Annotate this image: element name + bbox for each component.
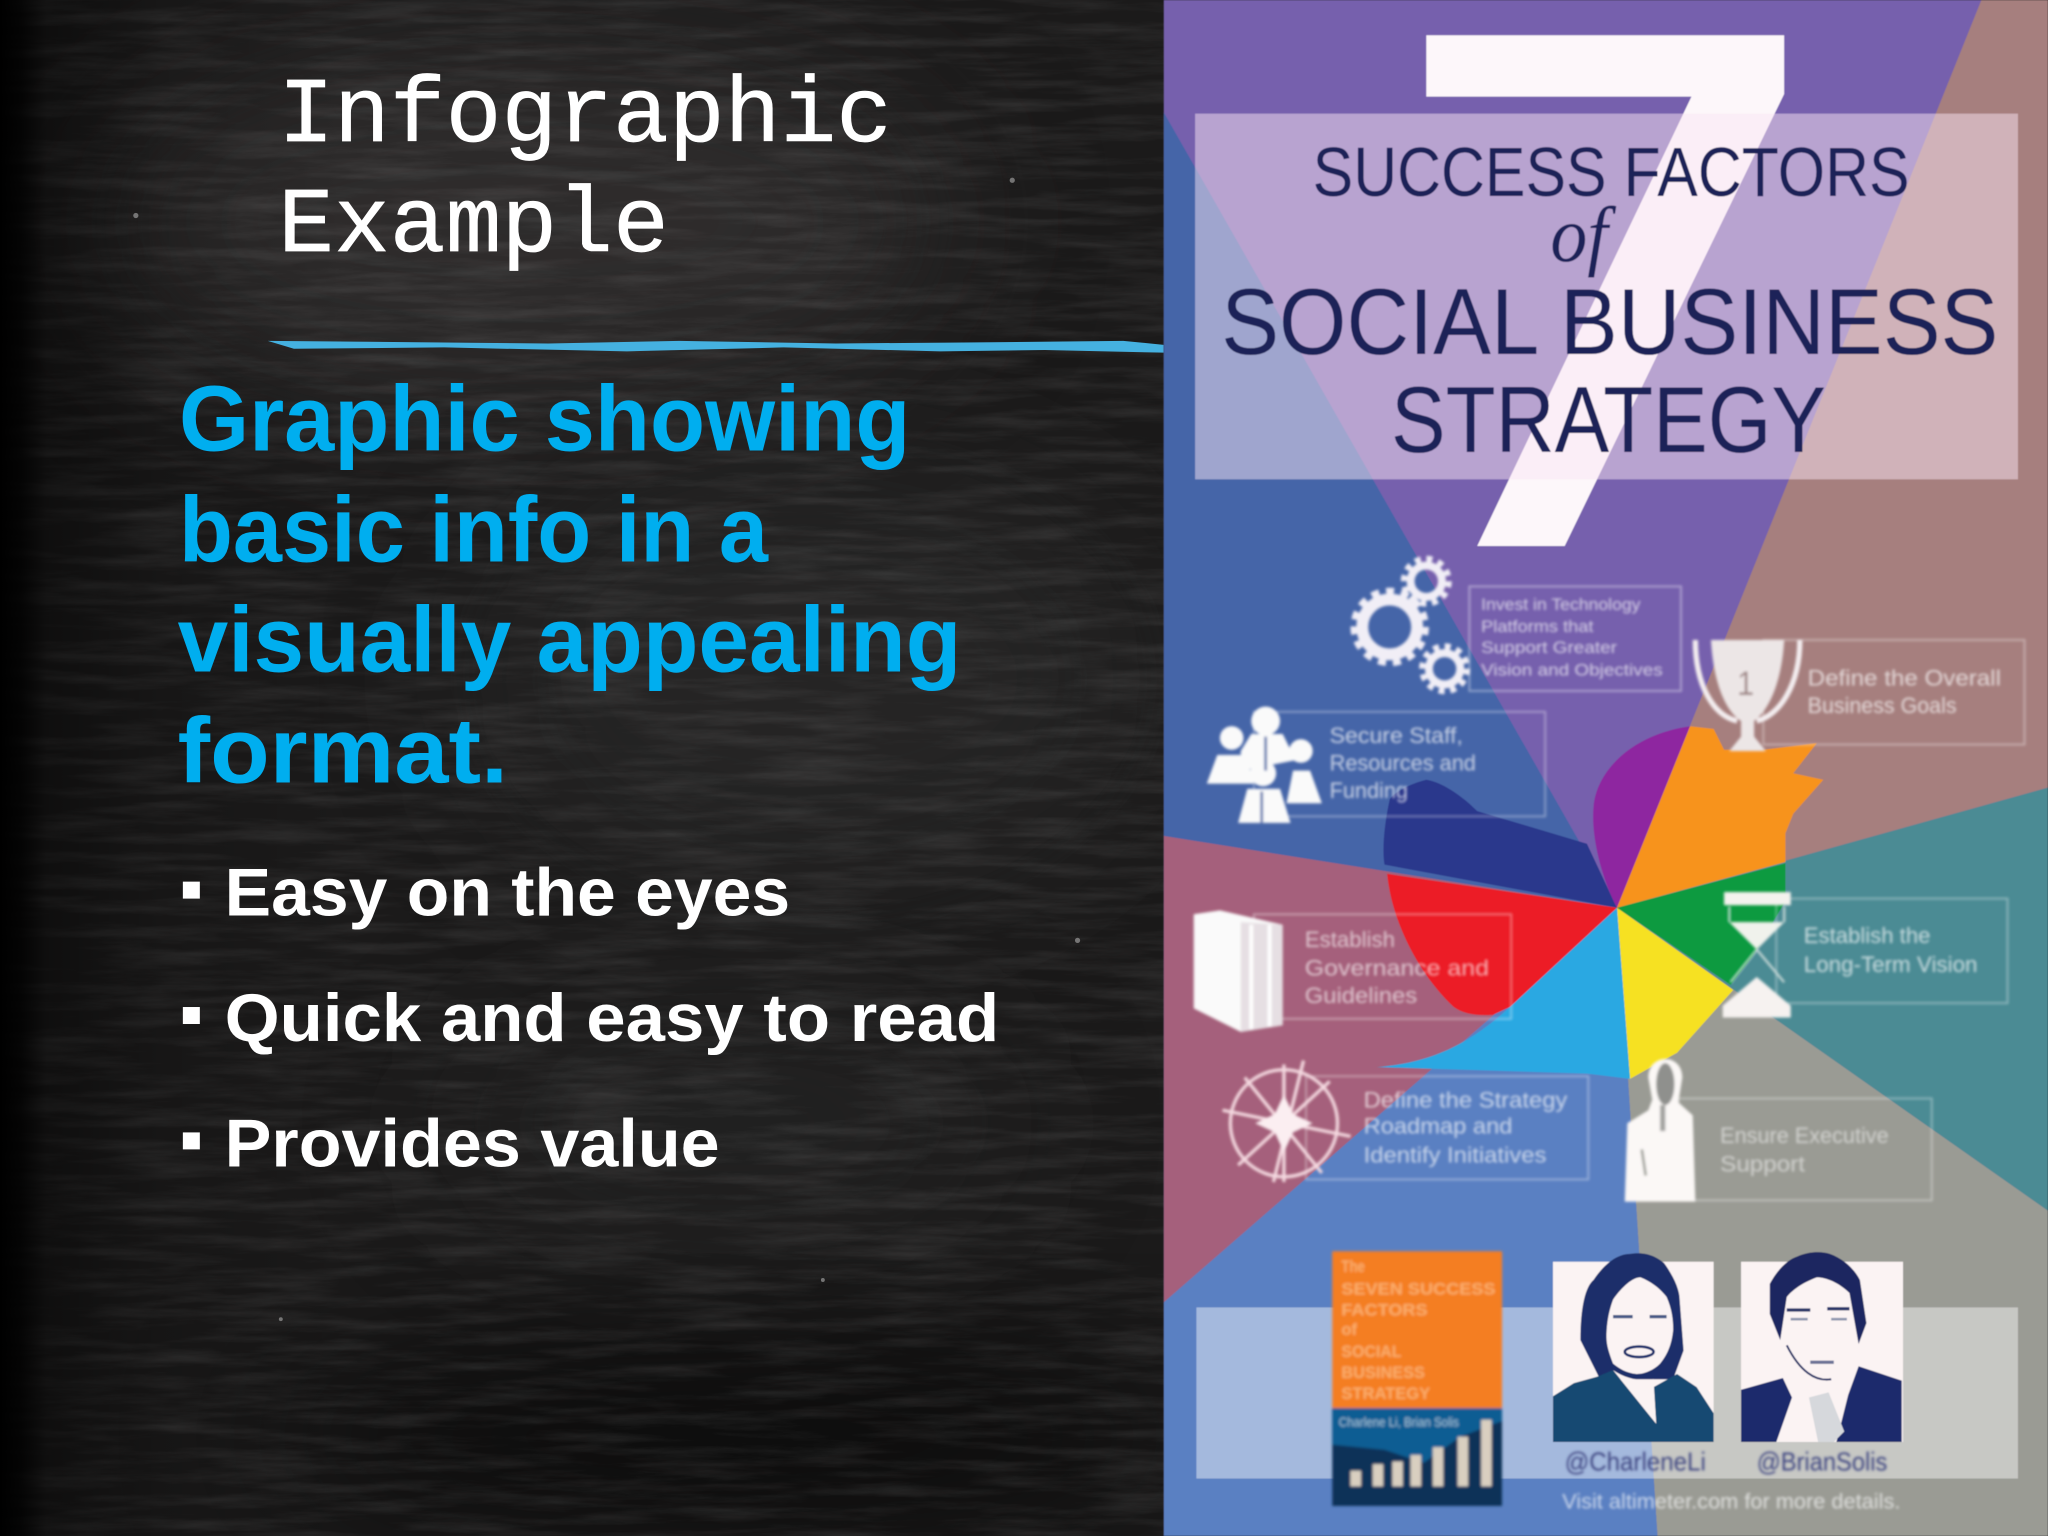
book cover: of	[1341, 1320, 1357, 1339]
book cover: The	[1341, 1257, 1365, 1276]
book cover: FACTORS	[1341, 1300, 1428, 1319]
heading: blue statement: basic info in a	[179, 478, 769, 582]
heading: blue statement: Graphic showing	[179, 367, 910, 471]
factor: executive support	[1625, 1059, 1932, 1202]
poster background wedges	[1164, 0, 2048, 1536]
factor: secure staff: Funding	[1330, 778, 1408, 803]
portrait: Charlene Li	[1553, 1253, 1714, 1442]
icon: people	[1207, 707, 1322, 823]
title: Example	[278, 174, 669, 279]
poster title: SUCCESS FACTORS	[1313, 133, 1910, 211]
factor: invest in technology: Invest in Technology	[1481, 595, 1641, 614]
factor: establish governance	[1194, 910, 1511, 1032]
poster title: STRATEGY	[1391, 367, 1826, 472]
book cover	[1332, 1251, 1502, 1506]
factor: executive support: Support	[1720, 1152, 1805, 1177]
poster title	[1221, 133, 1998, 472]
factor: define business goals: Define the Overall	[1808, 666, 2001, 691]
book cover: SEVEN SUCCESS	[1341, 1279, 1496, 1298]
book cover: SOCIAL	[1341, 1342, 1401, 1361]
bullet: easy on the eyes: Easy on the eyes	[225, 856, 790, 931]
book cover: BUSINESS	[1341, 1363, 1425, 1382]
bottom box	[1196, 1307, 2018, 1479]
factor: establish governance: Establish	[1305, 927, 1395, 952]
icon: compass rose	[1223, 1061, 1351, 1182]
factor: invest in technology: Support Greater	[1481, 638, 1617, 657]
heading: blue statement: format.	[178, 698, 508, 802]
icon: hourglass	[1723, 892, 1791, 1017]
factor: define business goals: Business Goals	[1808, 693, 1957, 718]
factor: secure staff	[1207, 707, 1545, 823]
factor: invest in technology: Vision and Objectives	[1481, 660, 1663, 679]
colour wheel	[1377, 726, 1823, 1079]
bullet list	[183, 856, 999, 1181]
blue chalk divider line	[268, 341, 1164, 353]
factor: secure staff: Resources and	[1330, 751, 1476, 776]
factor: define strategy: Identify Initiatives	[1364, 1142, 1546, 1167]
book cover: Charlene Li, Brian Solis	[1339, 1414, 1459, 1429]
book cover: STRATEGY	[1341, 1384, 1431, 1403]
panel: poster infographic	[1164, 0, 2048, 1536]
factor: define business goals	[1695, 640, 2024, 751]
heading: blue statement	[178, 367, 961, 802]
heading: blue statement: visually appealing	[178, 587, 961, 691]
factor: executive support: Ensure Executive	[1720, 1123, 1889, 1148]
title: Infographic	[278, 64, 892, 169]
icon: gears	[1354, 559, 1467, 691]
factor: establish governance: Governance and	[1305, 956, 1489, 981]
icon: trophy: 1	[1737, 665, 1754, 703]
handles	[1565, 1447, 1887, 1477]
factor: define strategy: Roadmap and	[1364, 1114, 1512, 1139]
panel: chalkboard background	[0, 0, 1202, 1536]
factor: establish vision: Long-Term Vision	[1804, 952, 1977, 977]
handles: @BrianSolis	[1757, 1447, 1887, 1477]
portrait: Brian Solis	[1741, 1252, 1903, 1442]
icon: executive silhouette	[1625, 1059, 1695, 1202]
poster title: of	[1550, 191, 1617, 278]
title	[278, 64, 892, 279]
title box	[1195, 114, 2018, 479]
icon: trophy	[1695, 640, 1800, 751]
factor: secure staff: Secure Staff,	[1330, 723, 1463, 748]
factor: define strategy	[1223, 1061, 1588, 1182]
factor: define strategy: Define the Strategy	[1364, 1088, 1568, 1113]
factor: establish vision	[1723, 892, 2008, 1017]
bullet: quick and easy to read: Quick and easy to read	[225, 981, 999, 1056]
bullet: provides value: Provides value	[225, 1106, 720, 1181]
factor: establish vision: Establish the	[1804, 923, 1930, 948]
big white numeral seven	[1426, 35, 1784, 546]
poster title: SOCIAL BUSINESS	[1221, 269, 1998, 374]
icon: book	[1194, 910, 1283, 1032]
factor: invest in technology	[1354, 559, 1681, 691]
factor: establish governance: Guidelines	[1305, 983, 1417, 1008]
handles: @CharleneLi	[1565, 1447, 1706, 1477]
factor: invest in technology: Platforms that	[1481, 617, 1594, 636]
footer link text: Visit altimeter.com for more details.	[1562, 1491, 1900, 1514]
